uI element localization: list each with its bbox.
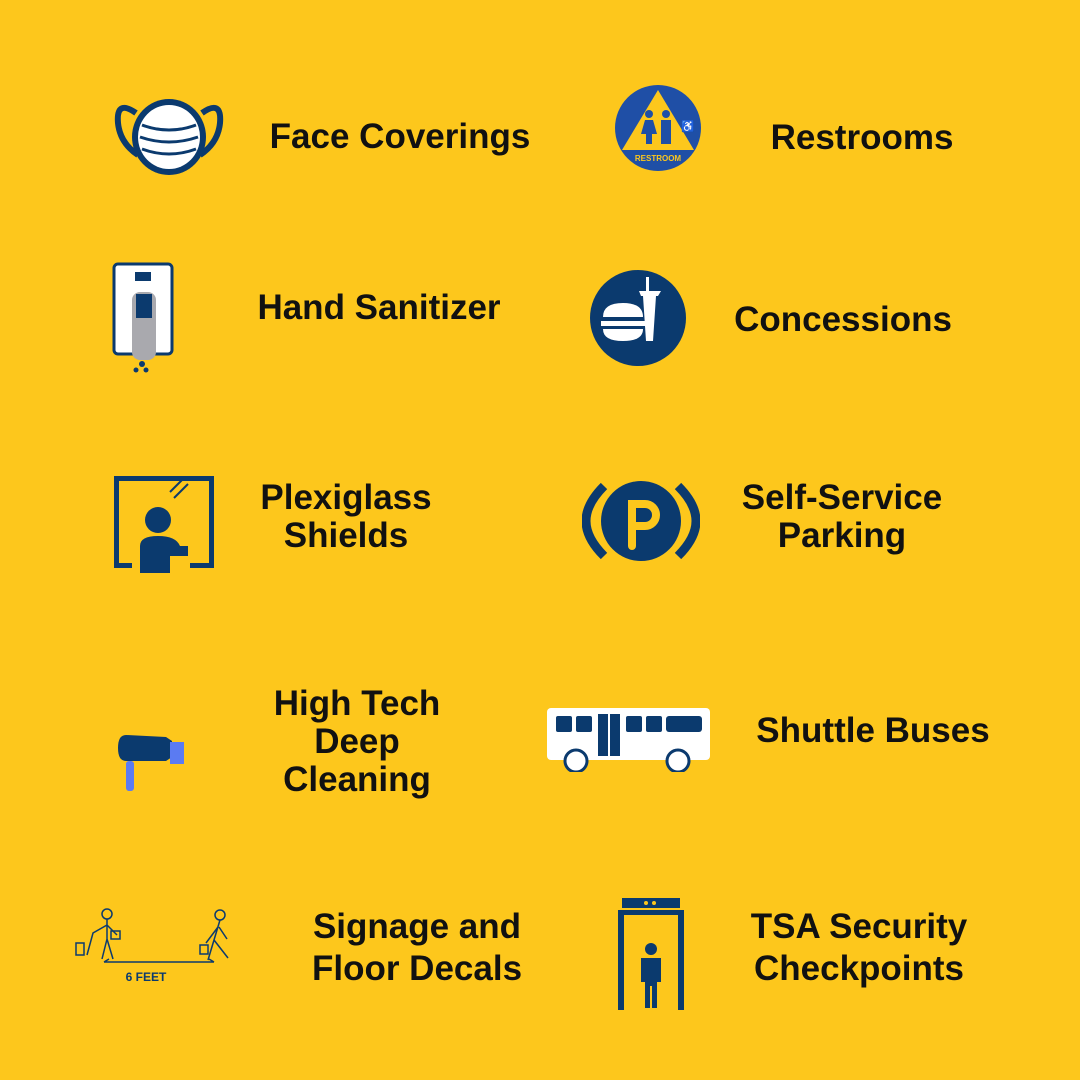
icon: shuttle bus bbox=[547, 708, 710, 772]
icon: plexiglass shield bbox=[114, 476, 214, 573]
heading: high tech deep cleaning bbox=[274, 684, 440, 799]
heading: TSA security checkpoints: TSA Security bbox=[751, 907, 967, 946]
heading: shuttle buses: Shuttle Buses bbox=[756, 711, 990, 750]
heading: TSA security checkpoints: Checkpoints bbox=[754, 949, 964, 988]
heading: plexiglass shields: Shields bbox=[284, 516, 408, 555]
icon: TSA walkthrough scanner bbox=[618, 898, 684, 1010]
icon: parking bbox=[582, 481, 700, 561]
heading: face coverings: Face Coverings bbox=[270, 117, 530, 156]
heading: self-service parking: Self-Service bbox=[742, 478, 942, 517]
icon: concessions bbox=[590, 270, 686, 366]
heading: plexiglass shields bbox=[260, 478, 432, 555]
icon: restroom: RESTROOM bbox=[635, 154, 681, 163]
heading: restrooms: Restrooms bbox=[771, 118, 953, 157]
heading: self-service parking bbox=[742, 478, 942, 555]
heading: TSA security checkpoints bbox=[751, 907, 967, 988]
heading: high tech deep cleaning: Deep bbox=[314, 722, 400, 761]
icon: restroom: ♿ bbox=[681, 120, 695, 133]
icon: face mask bbox=[114, 99, 224, 175]
heading: signage and floor decals bbox=[312, 907, 522, 988]
heading: concessions: Concessions bbox=[734, 300, 952, 339]
icon: hair dryer cleaning bbox=[118, 735, 184, 791]
icon: hand sanitizer bbox=[112, 262, 174, 372]
icon: restroom bbox=[615, 85, 701, 171]
heading: high tech deep cleaning: Cleaning bbox=[283, 760, 431, 799]
heading: high tech deep cleaning: High Tech bbox=[274, 684, 440, 723]
heading: signage and floor decals: Floor Decals bbox=[312, 949, 522, 988]
heading: signage and floor decals: Signage and bbox=[313, 907, 521, 946]
heading: hand sanitizer: Hand Sanitizer bbox=[257, 288, 501, 327]
heading: self-service parking: Parking bbox=[778, 516, 906, 555]
icon: social distancing figures: 6 FEET bbox=[126, 970, 167, 984]
heading: plexiglass shields: Plexiglass bbox=[260, 478, 432, 517]
icon: social distancing figures bbox=[75, 908, 228, 984]
